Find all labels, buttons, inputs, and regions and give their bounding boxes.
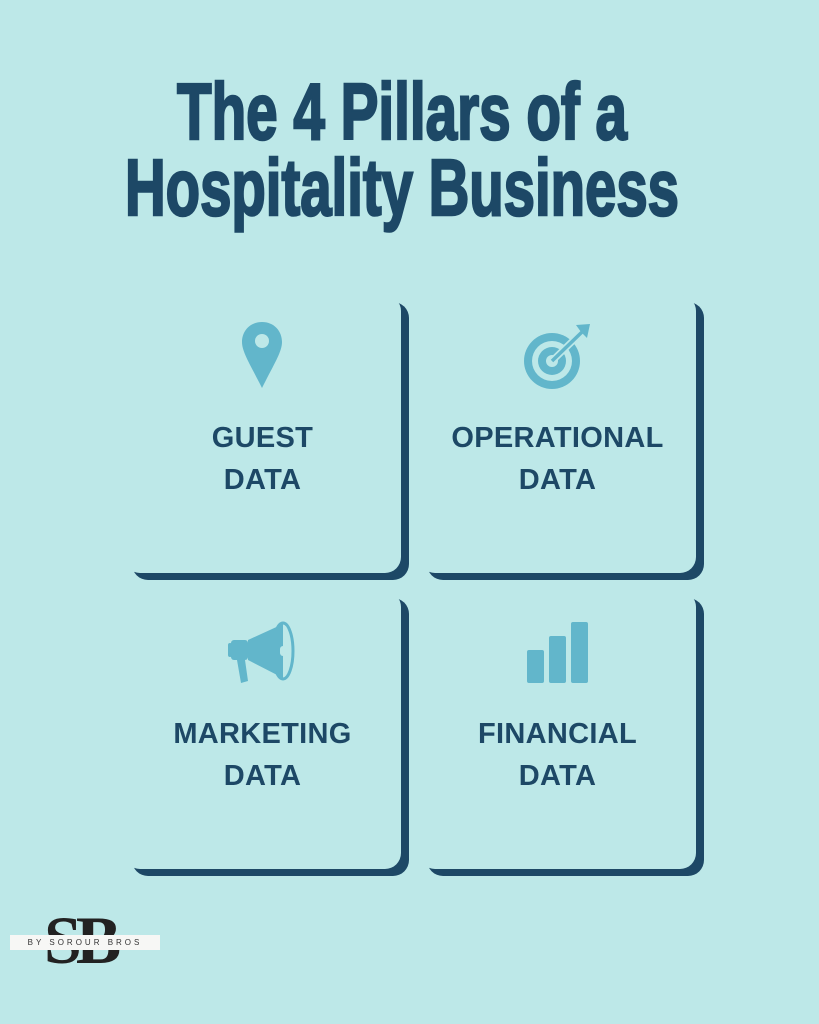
text: MARKETING	[173, 718, 352, 750]
text: DATA	[224, 760, 301, 792]
icon: map pin	[242, 322, 282, 388]
panel: guest data	[134, 303, 409, 580]
icon: bar chart	[527, 622, 588, 683]
text: GUEST	[212, 422, 313, 454]
title: The 4 Pillars of a	[177, 67, 627, 156]
text: DATA	[224, 464, 301, 496]
icon: megaphone	[228, 622, 294, 683]
logo	[10, 902, 160, 978]
panel: operational data	[429, 303, 704, 580]
panel: marketing data	[134, 599, 409, 876]
logo: BY SOROUR BROS	[28, 938, 142, 947]
title	[125, 67, 679, 233]
text: FINANCIAL	[478, 718, 637, 750]
text: DATA	[519, 464, 596, 496]
text: OPERATIONAL	[451, 422, 664, 454]
text: DATA	[519, 760, 596, 792]
panel: financial data	[429, 599, 704, 876]
icon: target	[524, 324, 590, 389]
logo: SB	[44, 902, 115, 978]
